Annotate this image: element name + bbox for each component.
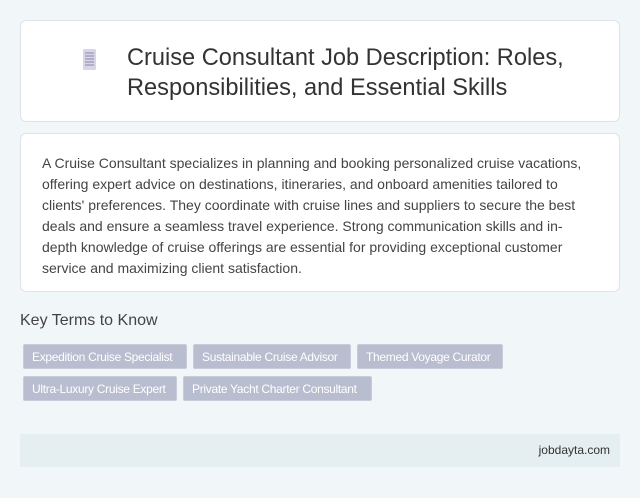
tag: Private Yacht Charter Consultant <box>192 382 357 396</box>
title: Cruise Consultant Job Description: Roles, Responsibilities, and Essential Skills <box>127 45 564 101</box>
tag <box>183 376 372 401</box>
tag: Expedition Cruise Specialist <box>32 350 172 364</box>
tag <box>193 344 351 369</box>
tag <box>23 376 177 401</box>
tag: Sustainable Cruise Advisor <box>202 350 338 364</box>
footer text: jobdayta.com <box>539 443 610 457</box>
description card <box>20 133 620 292</box>
footer <box>20 434 620 467</box>
header card <box>20 20 620 122</box>
icon: document <box>83 49 96 70</box>
key terms heading: Key Terms to Know <box>20 312 158 329</box>
tag: Themed Voyage Curator <box>366 350 490 364</box>
description text: A Cruise Consultant specializes in planning and booking personalized cruise vacations, offering expert advice on destinations, itineraries, and onboard amenities tailored to clients' preferences. They coordinate with cruise lines and suppliers to secure the best deals and ensure a seamless travel experience. Strong communication skills and in-depth knowledge of cruise offerings are essential for providing exceptional customer service and maximizing client satisfaction. <box>42 155 581 276</box>
tag: Ultra-Luxury Cruise Expert <box>32 382 166 396</box>
tag <box>357 344 503 369</box>
tag <box>23 344 187 369</box>
